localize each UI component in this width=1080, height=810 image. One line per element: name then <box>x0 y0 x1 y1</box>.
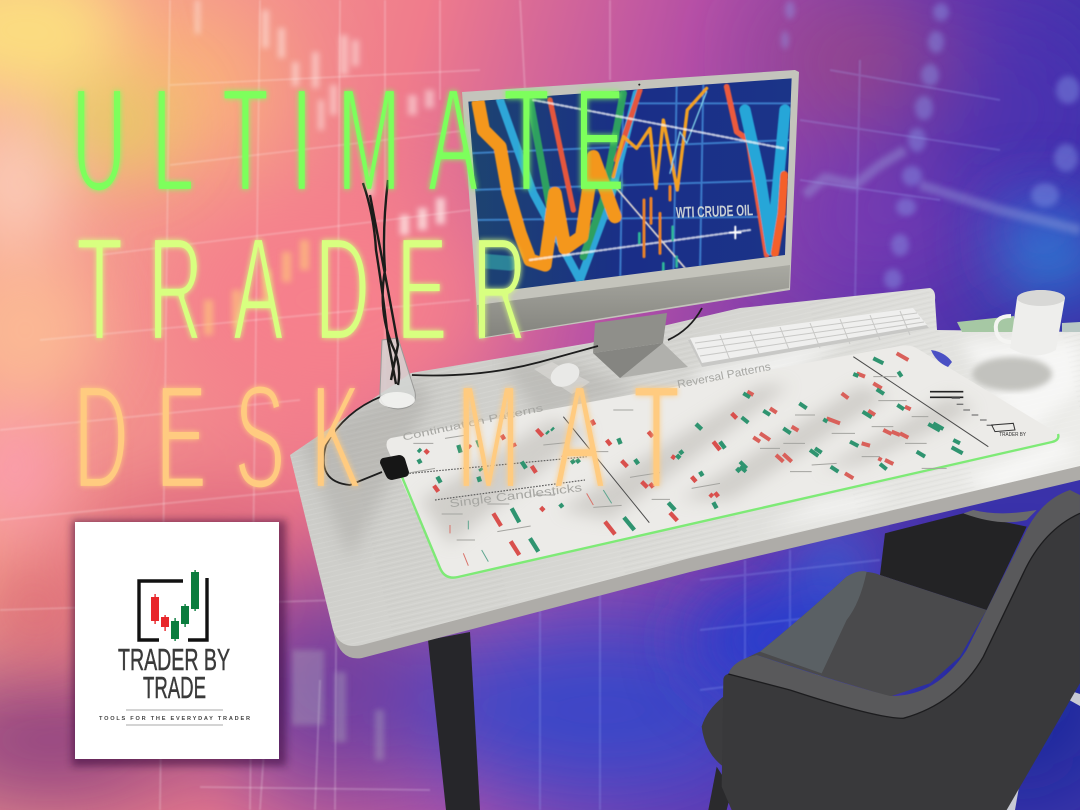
right red line <box>727 87 767 255</box>
title line 1: I <box>291 57 312 222</box>
mat green glowing edge <box>402 434 1058 578</box>
cables <box>324 308 702 485</box>
green line <box>530 93 623 257</box>
chair left cushion <box>702 697 723 767</box>
title line 3: D <box>74 354 128 519</box>
screen label: WTI CRUDE OIL <box>676 202 754 222</box>
captions <box>760 377 947 472</box>
title line 3: T <box>633 354 680 519</box>
title line 3: A <box>554 354 605 519</box>
logo wordmark: TRADER BY <box>118 642 230 677</box>
green candles <box>740 358 963 472</box>
mat shadows <box>420 385 975 545</box>
screen grid <box>468 83 790 293</box>
mat surface <box>386 345 1057 578</box>
monitor screen <box>468 78 792 293</box>
background blue dots <box>781 1 1080 289</box>
title line 2: T <box>76 206 123 371</box>
red candles <box>747 353 911 478</box>
logo icon: bracket frame and candlesticks <box>139 570 207 641</box>
coffee mug <box>957 290 1080 356</box>
thin orange line <box>613 88 707 190</box>
section divider and dotted rules <box>563 417 649 523</box>
mat table marks <box>952 398 993 425</box>
small candles <box>644 187 670 257</box>
black adapter <box>380 455 409 480</box>
logo panel: Trader by Trade: TRADE <box>143 670 206 705</box>
title line 3: M <box>457 354 520 519</box>
cyan line <box>500 93 637 280</box>
chair seat <box>730 572 987 697</box>
title line 2: R <box>148 206 203 371</box>
mat label: reversal patterns: Reversal Patterns <box>676 361 772 391</box>
mat candles, upper right section <box>740 353 1026 478</box>
mat label: single candlesticks: Single Candlesticks <box>449 482 583 510</box>
mouse <box>534 359 590 394</box>
glass <box>380 338 415 409</box>
vase with twigs <box>324 180 702 485</box>
title line 3: E <box>156 354 206 519</box>
title line 1: T <box>503 57 549 222</box>
title line 1: A <box>428 57 479 222</box>
title line 1: T <box>222 57 268 222</box>
title line 2: D <box>315 206 370 371</box>
mat candles, lower left section <box>402 403 740 566</box>
chair legs <box>708 767 732 810</box>
thick orange line <box>478 103 615 265</box>
section divider <box>853 357 988 447</box>
chair rim <box>728 490 1080 718</box>
captions <box>407 410 720 540</box>
dotted white lines <box>530 100 783 260</box>
monitor body <box>462 70 799 339</box>
desk <box>280 280 1080 810</box>
title line 1: U <box>72 57 126 222</box>
title line 1: M <box>338 57 400 222</box>
title line 2: E <box>397 206 447 371</box>
green candles <box>418 424 740 552</box>
title: Ultimate Trader Desk Mat <box>72 57 680 519</box>
background blurred candlesticks <box>195 0 445 235</box>
title line 2: R <box>472 206 527 371</box>
red candles <box>425 413 737 555</box>
chair back panel <box>880 513 1027 610</box>
title line 1: L <box>152 57 194 222</box>
logo tagline: TOOLS FOR THE EVERYDAY TRADER <box>99 716 250 722</box>
right cyan line <box>745 110 785 250</box>
background grid lines <box>0 0 610 810</box>
title line 3: K <box>311 354 361 519</box>
background chart line <box>805 150 1080 230</box>
background yellow chart candles <box>204 240 309 335</box>
desk edge <box>333 460 1080 658</box>
logo panel: Trader by Trade <box>75 522 279 759</box>
title line 2: A <box>233 206 284 371</box>
title line 1: E <box>574 57 625 222</box>
monitor <box>462 70 799 378</box>
keyboard <box>688 308 929 367</box>
desk legs <box>428 632 480 810</box>
twigs <box>363 180 399 385</box>
title line 3: S <box>235 354 285 519</box>
desk top <box>290 288 1080 646</box>
background pale bars <box>292 650 384 760</box>
logo drop shadow <box>72 520 286 766</box>
desk mat with candlestick patterns <box>386 345 1058 578</box>
chair body <box>722 513 1080 810</box>
office chair <box>702 490 1080 810</box>
thin single candles <box>450 493 593 566</box>
mat small brand mark: TRADER BY <box>999 432 1026 438</box>
mug shadow <box>972 357 1052 391</box>
red line <box>550 90 640 210</box>
purple smudge on desk <box>931 350 952 367</box>
mat label: continuation patterns: Continuation Patterns <box>402 403 544 444</box>
monitor stand <box>593 313 688 378</box>
right side grid lines <box>540 60 1000 810</box>
mat probability heading <box>930 392 963 397</box>
